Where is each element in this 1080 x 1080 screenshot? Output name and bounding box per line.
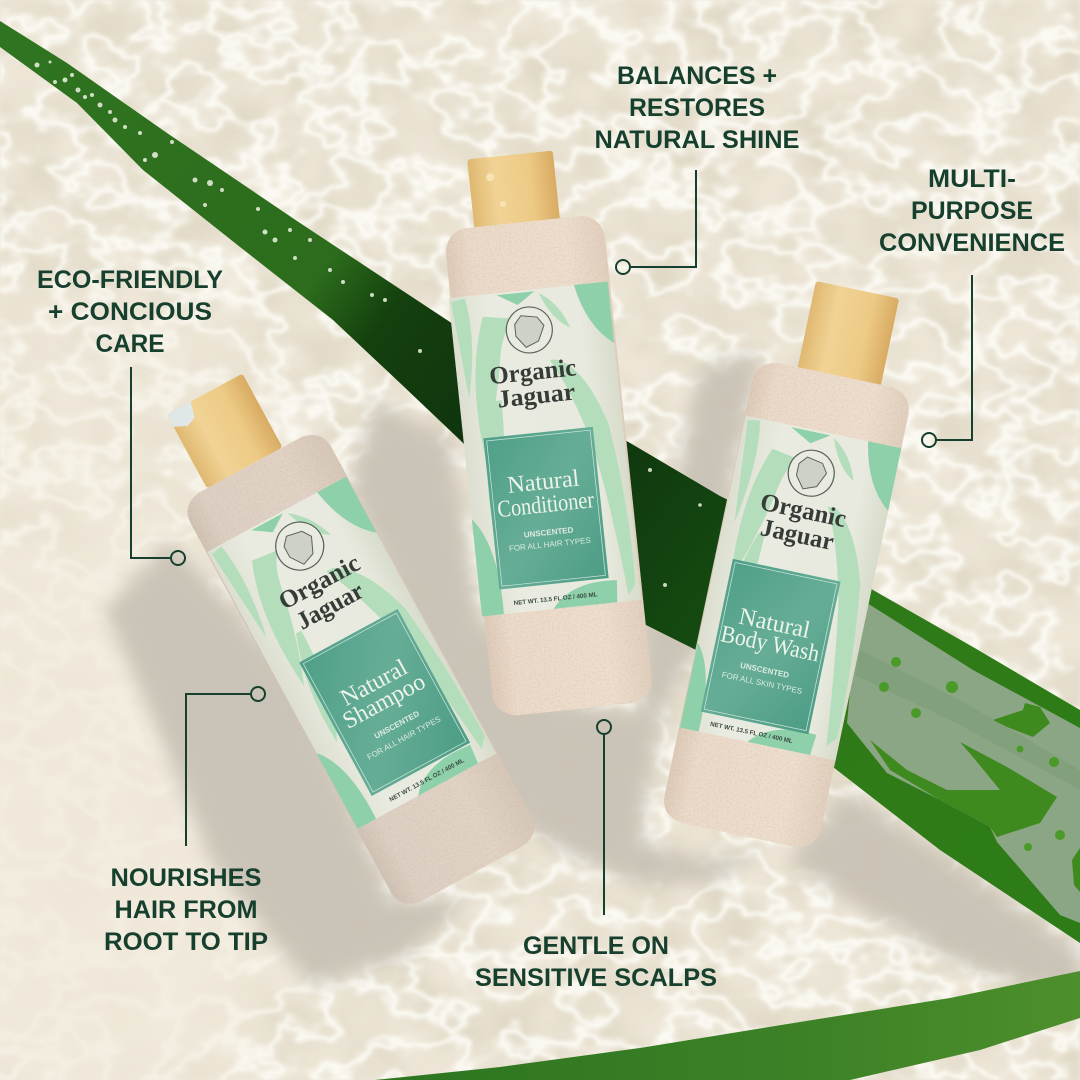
product panel: UNSCENTED <box>373 709 421 741</box>
callout: balances and restores <box>594 62 800 274</box>
shampoo label: NET WT. 13.5 FL OZ / 400 ML <box>388 757 466 803</box>
logo <box>753 442 859 558</box>
conditioner body <box>443 214 654 718</box>
product panel: Conditioner <box>496 487 595 523</box>
callout: nourishes hair: HAIR FROM <box>114 896 258 924</box>
callout: balances and restores: NATURAL SHINE <box>594 126 800 154</box>
droplets on leaf <box>34 60 702 587</box>
logo: Organic <box>758 489 849 533</box>
leaf sheen: pale wet reflection <box>847 603 1080 923</box>
product panel <box>299 609 470 796</box>
logo: Jaguar <box>496 379 576 414</box>
product panel: Natural <box>506 466 581 499</box>
callout: multi-purpose convenience: CONVENIENCE <box>879 229 1065 257</box>
conditioner cap <box>467 151 560 229</box>
callout: nourishes hair <box>104 687 268 956</box>
bottle: natural body wash <box>660 272 931 851</box>
callout: eco-friendly care: + CONCIOUS <box>48 298 212 326</box>
logo: Jaguar <box>292 577 368 635</box>
shampoo cap <box>167 374 283 488</box>
bottle shadows on water <box>105 350 1080 1000</box>
shampoo body <box>180 427 542 912</box>
callout: multi-purpose convenience: PURPOSE <box>911 197 1033 225</box>
callout: balances and restores: BALANCES + <box>617 62 777 90</box>
product panel: Natural <box>336 654 412 712</box>
product panel: FOR ALL HAIR TYPES <box>366 715 442 762</box>
callout: eco-friendly care <box>37 266 223 565</box>
product panel: FOR ALL HAIR TYPES <box>508 536 591 553</box>
product panel: Natural <box>736 604 813 644</box>
product panel: Shampoo <box>338 669 430 735</box>
logo <box>250 504 377 638</box>
product panel: UNSCENTED <box>739 661 790 680</box>
callout: gentle on sensitive scalps: GENTLE ON <box>523 932 669 960</box>
logo <box>483 303 580 414</box>
callout: balances and restores: RESTORES <box>629 94 765 122</box>
product panel <box>701 559 841 734</box>
bottle: natural shampoo <box>140 353 542 912</box>
product panel <box>483 427 609 589</box>
callout: gentle on sensitive scalps: SENSITIVE SCALPS <box>475 964 717 992</box>
bottle: natural conditioner <box>434 146 654 718</box>
callout: nourishes hair: NOURISHES <box>110 864 262 892</box>
body wash cap <box>797 281 899 387</box>
leaf streak: darker reflection band <box>855 650 1080 790</box>
conditioner label: NET WT. 13.5 FL OZ / 400 ML <box>513 591 598 607</box>
product panel: FOR ALL SKIN TYPES <box>721 670 803 696</box>
conditioner label <box>449 281 641 616</box>
shampoo label <box>207 477 496 829</box>
body wash body <box>660 359 913 851</box>
logo: Organic <box>274 550 365 615</box>
callout: multi-purpose convenience <box>879 165 1065 447</box>
callout: eco-friendly care: ECO-FRIENDLY <box>37 266 223 294</box>
leaf patch: wet green areas <box>870 703 1080 892</box>
body wash label <box>680 415 901 760</box>
callout: nourishes hair: ROOT TO TIP <box>104 928 268 956</box>
body wash label: NET WT. 13.5 FL OZ / 400 ML <box>710 721 793 745</box>
aloe leaf: bottom <box>375 971 1080 1080</box>
callout: multi-purpose convenience: MULTI- <box>928 165 1016 193</box>
logo: Jaguar <box>758 514 836 556</box>
callout: eco-friendly care: CARE <box>96 330 164 358</box>
product panel: UNSCENTED <box>523 525 574 540</box>
logo: Organic <box>488 354 577 390</box>
product panel: Body Wash <box>718 621 822 667</box>
callout: gentle on sensitive scalps <box>475 720 717 992</box>
